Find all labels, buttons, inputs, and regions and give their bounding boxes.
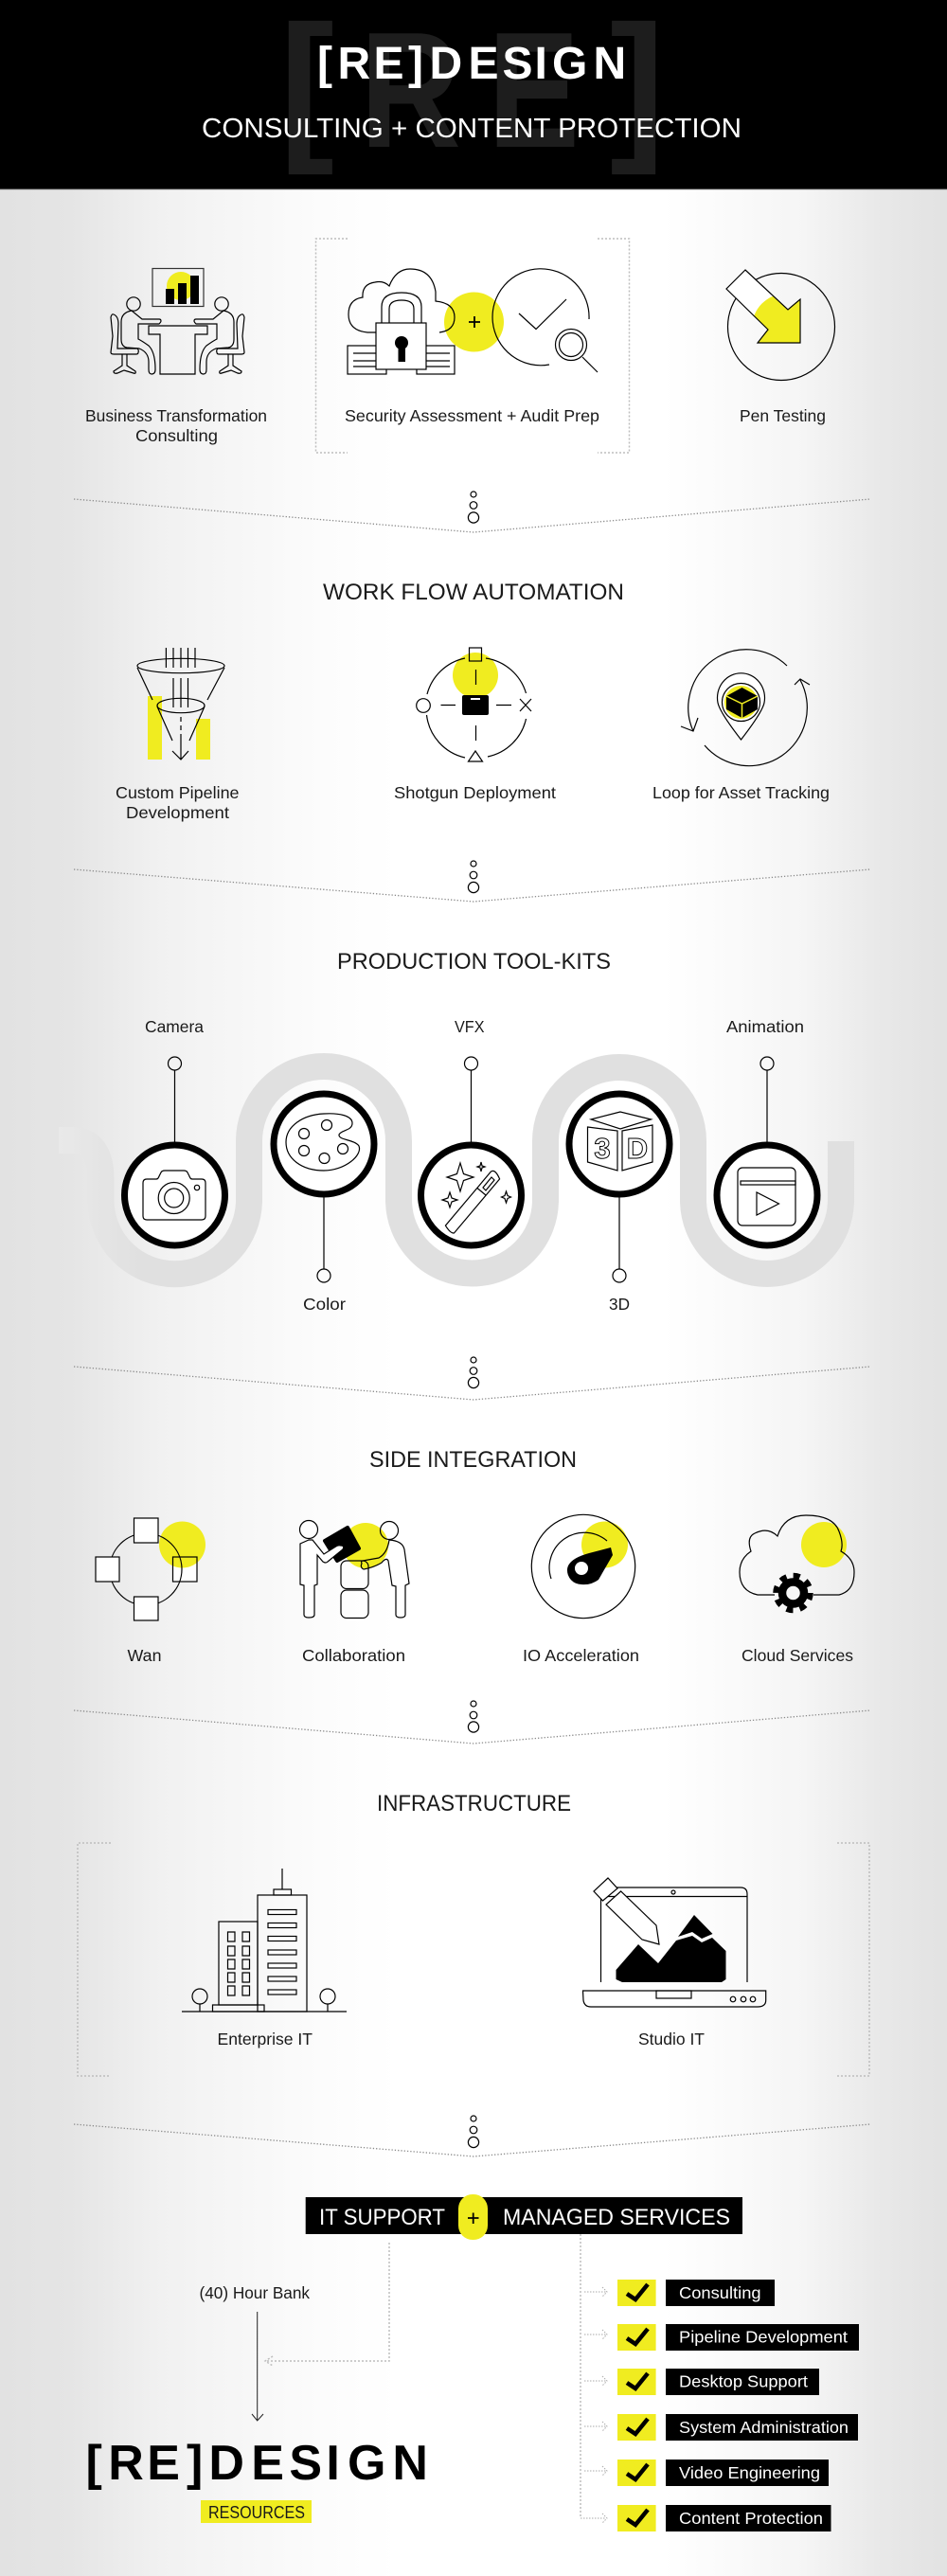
label: business transformation: Business Transformation [85,406,267,425]
banner: it support + managed services: IT SUPPORT [319,2205,445,2230]
checklist: pipeline development: Pipeline Development [679,2328,848,2347]
panel: infrastructure [78,1791,869,2076]
panel: work flow automation [116,580,830,822]
checklist: content protection: Content Protection [679,2509,823,2528]
icon: 3d cube: 3 [594,1132,611,1165]
heading: SIDE INTEGRATION [369,1447,577,1473]
label: security assessment: Security Assessment + Audit Prep [345,406,599,425]
subtitle: CONSULTING + CONTENT PROTECTION [202,114,742,144]
label: studio it: Studio IT [638,2030,705,2048]
banner: it support + managed services: MANAGED SERVICES [503,2205,730,2230]
icon: cloud services [740,1515,854,1610]
label: enterprise it: Enterprise IT [218,2030,313,2048]
icon: enterprise building [182,1869,347,2012]
logo: [RE]DESIGN [317,39,626,89]
label: collaboration: Collaboration [302,1646,405,1665]
label: pen testing: Pen Testing [740,406,826,425]
label: 3d: 3D [609,1295,630,1314]
icon: business transformation meeting [111,269,244,374]
divider [74,1357,870,1400]
label: business transformation [85,406,267,445]
label: cloud services: Cloud Services [742,1646,853,1665]
divider [74,492,870,532]
label: animation: Animation [726,1017,804,1036]
checklist: content protection [617,2505,831,2531]
connector lines [265,2234,607,2523]
label: io acceleration: IO Acceleration [523,1646,639,1665]
label: hour bank: (40) Hour Bank [199,2283,310,2302]
bracket frame [316,239,629,453]
icon: 3d cube [569,1094,670,1194]
logo: [RE]DESIGN [85,2436,428,2491]
icon: color palette [274,1094,374,1194]
watermark: [RE]: E [488,0,580,182]
icon: pen testing [726,270,835,381]
icon: security assessment and audit [348,269,598,374]
label: shotgun deployment: Shotgun Deployment [394,783,556,802]
bracket frame [78,1843,869,2076]
checklist: video engineering [617,2460,829,2486]
label: wan: Wan [127,1646,161,1665]
heading: INFRASTRUCTURE [377,1791,571,1816]
icon: custom pipeline funnel [137,648,224,760]
divider [74,2116,870,2156]
icon: vfx wand [420,1145,521,1245]
icon: studio laptop [583,1878,766,2007]
header banner [0,0,947,189]
checklist: consulting [617,2280,775,2306]
icon: wan network [96,1518,205,1620]
label: camera: Camera [145,1017,204,1036]
resources tag: RESOURCES [208,2503,305,2522]
label: color: Color [303,1295,346,1314]
arrow: hour bank to resources [252,2312,263,2421]
label: vfx: VFX [455,1017,485,1036]
icon: shotgun deployment [417,648,531,761]
panel: consulting services [85,239,835,453]
panel: it support and managed services [85,2194,859,2531]
heading: WORK FLOW AUTOMATION [323,580,624,605]
checklist: desktop support: Desktop Support [679,2371,808,2390]
label: custom pipeline [116,783,239,822]
icon: 3d cube: D [627,1132,648,1165]
panel: side integration [96,1447,854,1665]
label: custom pipeline: Custom Pipeline [116,783,239,802]
watermark: [RE]: R [360,0,461,182]
panel: production tool-kits [59,949,841,1314]
stems and nodes [169,1057,774,1282]
label: asset tracking: Loop for Asset Tracking [652,783,830,802]
icon: camera [125,1145,225,1245]
checklist: pipeline development [617,2324,859,2351]
divider [74,861,870,902]
icon: collaboration [299,1521,409,1618]
wave ribbon [59,1066,841,1274]
icon: asset tracking loop [681,650,810,766]
checklist: system administration: System Administration [679,2418,849,2437]
label: custom pipeline: Development [126,803,229,822]
checklist: video engineering: Video Engineering [679,2463,820,2482]
checklist: consulting: Consulting [679,2283,761,2302]
divider [74,1701,870,1744]
checklist: desktop support [617,2369,819,2395]
banner: it support + managed services [306,2194,742,2240]
icon: io acceleration gauge [531,1514,635,1619]
icon: animation player [717,1145,817,1245]
watermark: [RE] [279,0,665,182]
checklist: system administration [617,2414,858,2441]
label: business transformation: Consulting [135,426,218,445]
heading: PRODUCTION TOOL-KITS [337,949,611,975]
